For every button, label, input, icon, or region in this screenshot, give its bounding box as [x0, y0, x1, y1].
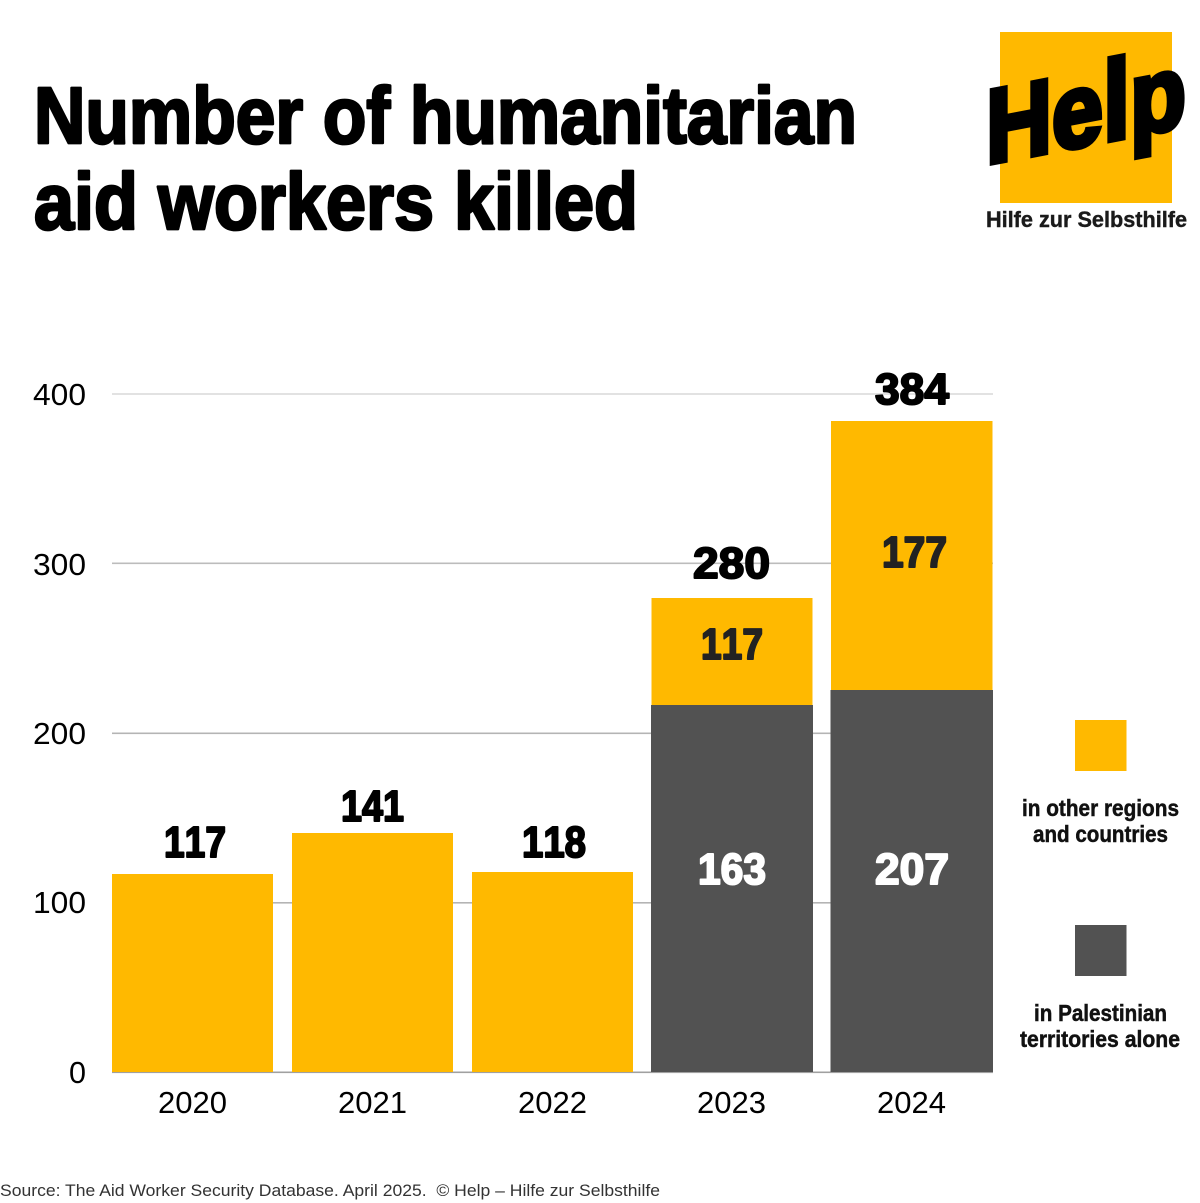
title: [34, 71, 857, 246]
x axis labels: 2022: [518, 1085, 587, 1120]
y axis labels: 200: [33, 716, 86, 751]
y axis labels: [33, 377, 86, 1090]
source line: Source: The Aid Worker Security Database. April 2025. © Help – Hilfe zur Selbsthilfe: [0, 1181, 660, 1200]
value labels: 117: [701, 620, 763, 669]
legend label: other regions: and countries: [1033, 821, 1168, 847]
value labels: 117: [164, 818, 226, 867]
value labels: 177: [882, 528, 947, 577]
logo wordmark: Help: [986, 25, 1186, 189]
x axis labels: 2024: [877, 1085, 946, 1120]
legend label: Palestinian territories: territories alone: [1020, 1026, 1180, 1052]
value labels: [164, 365, 950, 894]
legend label: Palestinian territories: in Palestinian: [1034, 1000, 1167, 1026]
bar 2022: [472, 872, 633, 1072]
legend swatch: Palestinian territories: [1075, 925, 1126, 976]
bar 2023 other regions: [652, 598, 812, 705]
stacked bar chart: [33, 365, 993, 1120]
legend label: other regions: [1022, 795, 1179, 847]
value labels: 384: [875, 365, 950, 414]
legend label: Palestinian territories: [1020, 1000, 1180, 1052]
value labels: 141: [341, 782, 404, 831]
y axis labels: 400: [33, 377, 86, 412]
logo tagline: Hilfe zur Selbsthilfe: [986, 207, 1187, 232]
bar 2020: [112, 874, 273, 1072]
title: Number of humanitarian: [34, 71, 857, 160]
legend label: other regions: in other regions: [1022, 795, 1179, 821]
legend swatch: other regions: [1075, 720, 1126, 771]
bar 2024 other regions: [831, 421, 992, 690]
x axis labels: [158, 1085, 946, 1120]
legend: [1020, 720, 1180, 1052]
x axis labels: 2020: [158, 1085, 227, 1120]
y axis gridlines: [112, 393, 993, 1073]
value labels: 280: [693, 539, 770, 588]
bar 2024 Palestinian territories: [830, 690, 993, 1072]
title: aid workers killed: [34, 157, 638, 246]
value labels: 163: [698, 845, 766, 894]
x axis labels: 2023: [697, 1085, 766, 1120]
value labels: 118: [522, 818, 586, 867]
bar 2021: [292, 833, 453, 1072]
logo yellow square: [1000, 32, 1172, 203]
y axis labels: 100: [33, 885, 86, 920]
y axis labels: 300: [33, 547, 86, 582]
value labels: 207: [875, 845, 949, 894]
logo: Help: [986, 25, 1187, 232]
y axis labels: 0: [69, 1055, 86, 1090]
x axis labels: 2021: [338, 1085, 407, 1120]
bar 2023 Palestinian territories: [651, 705, 813, 1072]
